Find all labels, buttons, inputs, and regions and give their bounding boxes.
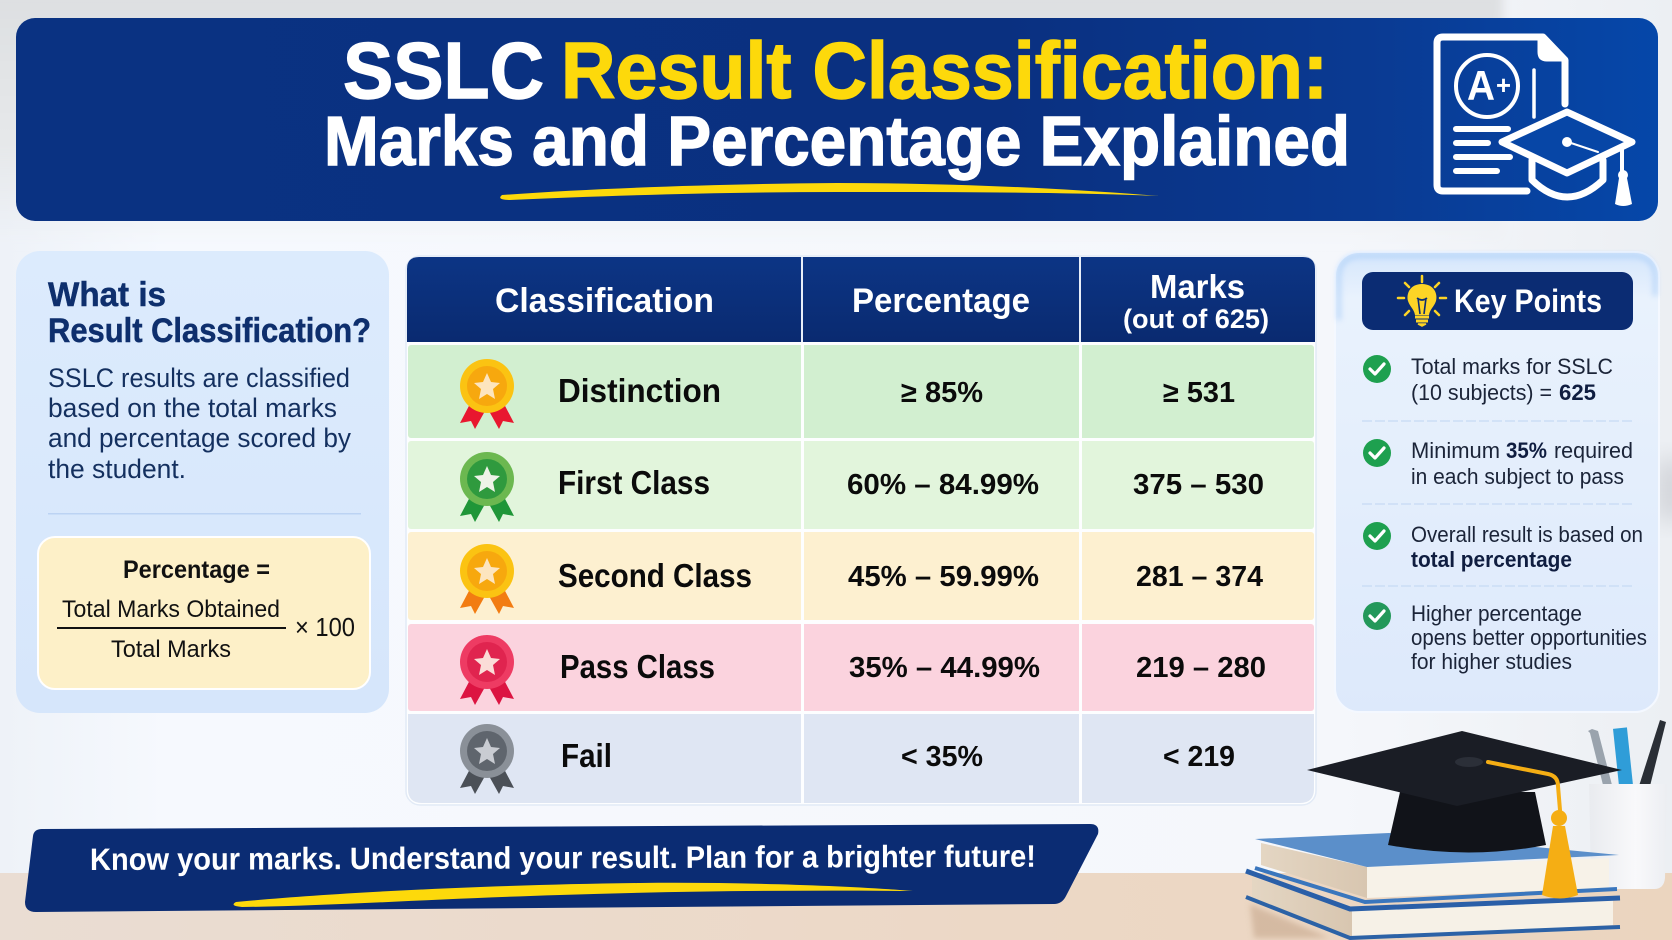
key point: minimum to pass [1363,438,1633,489]
key point: higher percentage [1363,601,1647,674]
key point: overall result: total percentage [1411,547,1572,572]
panel heading: Result Classification? [48,312,371,350]
row: pass class: 35% – 44.99% [849,652,1040,684]
row: second class: 281 – 374 [1136,561,1263,593]
icon: result sheet and graduation cap: + [1496,70,1511,100]
formula box [38,537,370,689]
panel description: SSLC results are classified [48,363,350,393]
panel description: based on the total marks [48,393,337,423]
icon: light bulb [1398,276,1446,326]
formula box: Percentage = [123,556,270,584]
panel: what is result classification [16,251,389,713]
icon: pink medal [460,635,514,705]
key point: higher percentage: Higher percentage [1411,601,1582,626]
icon: gold medal red ribbon [460,359,514,429]
key point: overall result [1363,522,1643,572]
panel heading: What is [48,276,166,314]
key point: minimum to pass: 35% [1506,438,1547,463]
table header: Percentage [852,282,1030,320]
row: pass class [408,624,1314,711]
row: first class [408,441,1314,529]
icon: result sheet and graduation cap [1437,37,1632,206]
formula box: Total Marks Obtained [62,596,280,623]
key point: total marks [1363,354,1613,405]
key point: total marks: 625 [1559,380,1596,405]
row: second class [408,532,1314,620]
panel heading [48,276,371,350]
table header: Classification [495,282,714,320]
key point: total marks: (10 subjects) = [1411,380,1552,405]
stacked books [1246,833,1620,938]
key point: minimum to pass: Minimum [1411,438,1500,463]
header banner [16,18,1658,221]
row: first class: 375 – 530 [1133,469,1264,501]
row: second class: Second Class [558,557,752,594]
table header: (out of 625) [1123,304,1269,334]
row: fail [408,714,1314,803]
key point: higher percentage: opens better opportunities [1411,625,1647,650]
row: pass class: Pass Class [560,648,715,685]
title: SSLC [343,26,544,115]
row: first class: First Class [558,464,710,501]
title underline swoosh [500,183,1159,200]
row: distinction [408,345,1314,438]
row: distinction: Distinction [558,372,721,409]
key point: minimum to pass: in each subject to pass [1411,464,1624,489]
tagline banner [25,824,1098,912]
panel description [48,363,351,484]
key point: overall result: Overall result is based on [1411,522,1643,547]
panel description: the student. [48,454,186,484]
icon: gold medal orange ribbon [460,544,514,614]
photo: graduation cap, books and pen cup on desk [1246,720,1667,938]
key points heading: Key Points [1454,283,1602,319]
key point: total marks: Total marks for SSLC [1411,354,1613,379]
graduation cap [1307,731,1622,898]
row: fail: < 35% [901,741,983,773]
icon: grey medal [460,724,514,794]
table header [407,257,1315,342]
row: fail: Fail [561,737,612,774]
panel: classification table [406,256,1316,805]
key point: higher percentage: for higher studies [1411,649,1572,674]
pen cup with pens [1588,720,1667,889]
row: second class: 45% – 59.99% [848,561,1039,593]
row: fail: < 219 [1163,741,1235,773]
panel: key points [1335,252,1659,712]
row: distinction: ≥ 85% [901,377,983,409]
formula box: × 100 [295,612,355,642]
row: distinction: ≥ 531 [1163,377,1235,409]
row: first class: 60% – 84.99% [847,469,1039,501]
key point: minimum to pass: required [1554,438,1633,463]
table header: Marks [1150,268,1245,305]
panel description: and percentage scored by [48,423,351,453]
icon: green medal [460,452,514,522]
key points heading [1362,272,1633,330]
formula box: Total Marks [111,636,231,663]
icon: result sheet and graduation cap: A [1467,62,1495,109]
tagline text: Know your marks. Understand your result. Plan for a brighter future! [90,839,1036,877]
title: Marks and Percentage Explained [324,102,1350,180]
row: pass class: 219 – 280 [1136,652,1266,684]
tagline underline swoosh [234,883,913,907]
title [324,26,1350,180]
title: Result Classification: [561,26,1328,115]
